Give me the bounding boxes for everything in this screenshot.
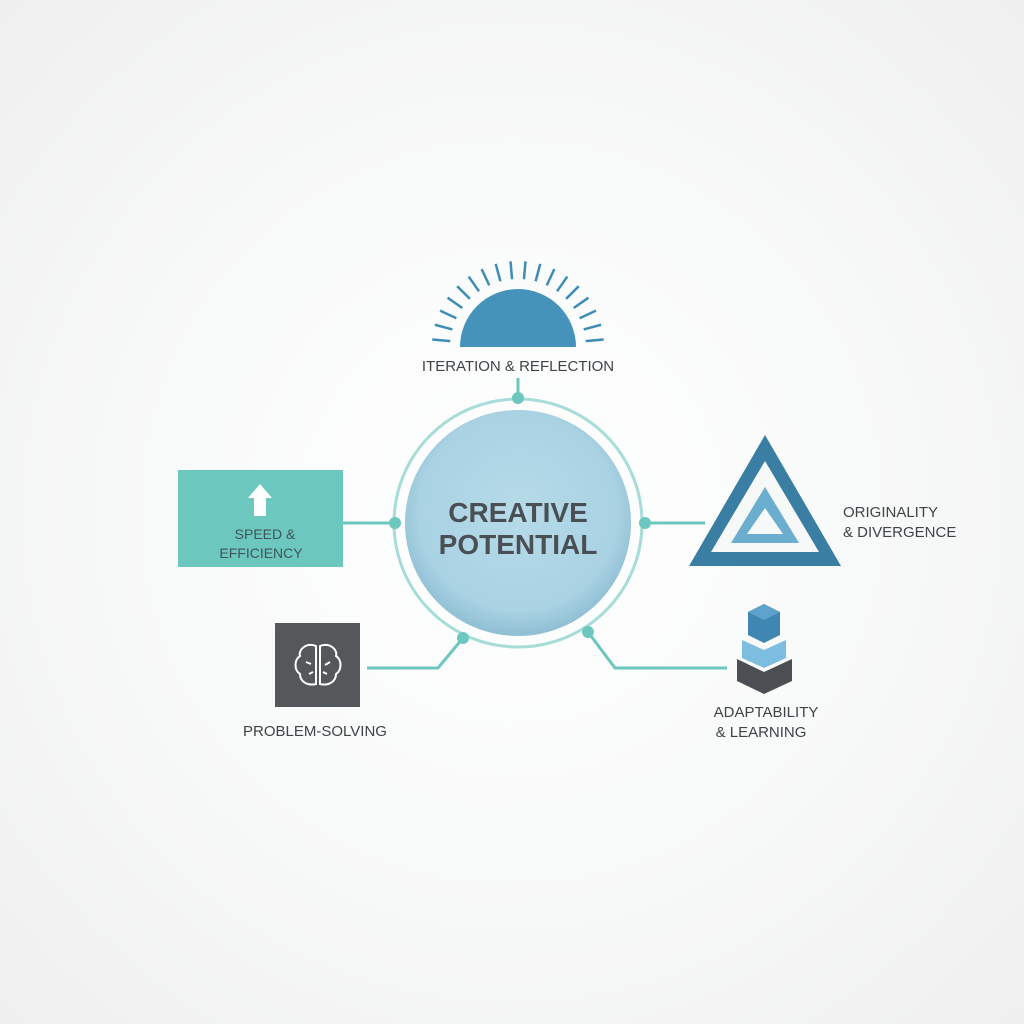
center circle: CREATIVE bbox=[448, 497, 588, 528]
label: adaptability: ADAPTABILITY bbox=[714, 704, 818, 721]
label: iteration: ITERATION & REFLECTION bbox=[422, 358, 614, 375]
panel: speed: SPEED & bbox=[235, 526, 296, 542]
icon: blocks bbox=[737, 604, 792, 694]
center circle bbox=[389, 392, 651, 647]
center circle: POTENTIAL bbox=[439, 529, 597, 560]
label: originality: ORIGINALITY bbox=[843, 504, 938, 521]
panel: speed bbox=[178, 470, 343, 567]
panel: speed: EFFICIENCY bbox=[219, 545, 303, 561]
label: adaptability: & LEARNING bbox=[716, 724, 806, 741]
label: problem-solving: PROBLEM-SOLVING bbox=[243, 723, 387, 740]
label: originality bbox=[843, 504, 956, 541]
icon: triangle bbox=[689, 435, 841, 566]
label: originality: & DIVERGENCE bbox=[843, 524, 956, 541]
panel: problem-solving icon bbox=[275, 623, 360, 707]
icon: sun bbox=[432, 261, 604, 347]
label: adaptability bbox=[714, 704, 818, 741]
connectors bbox=[343, 378, 727, 668]
